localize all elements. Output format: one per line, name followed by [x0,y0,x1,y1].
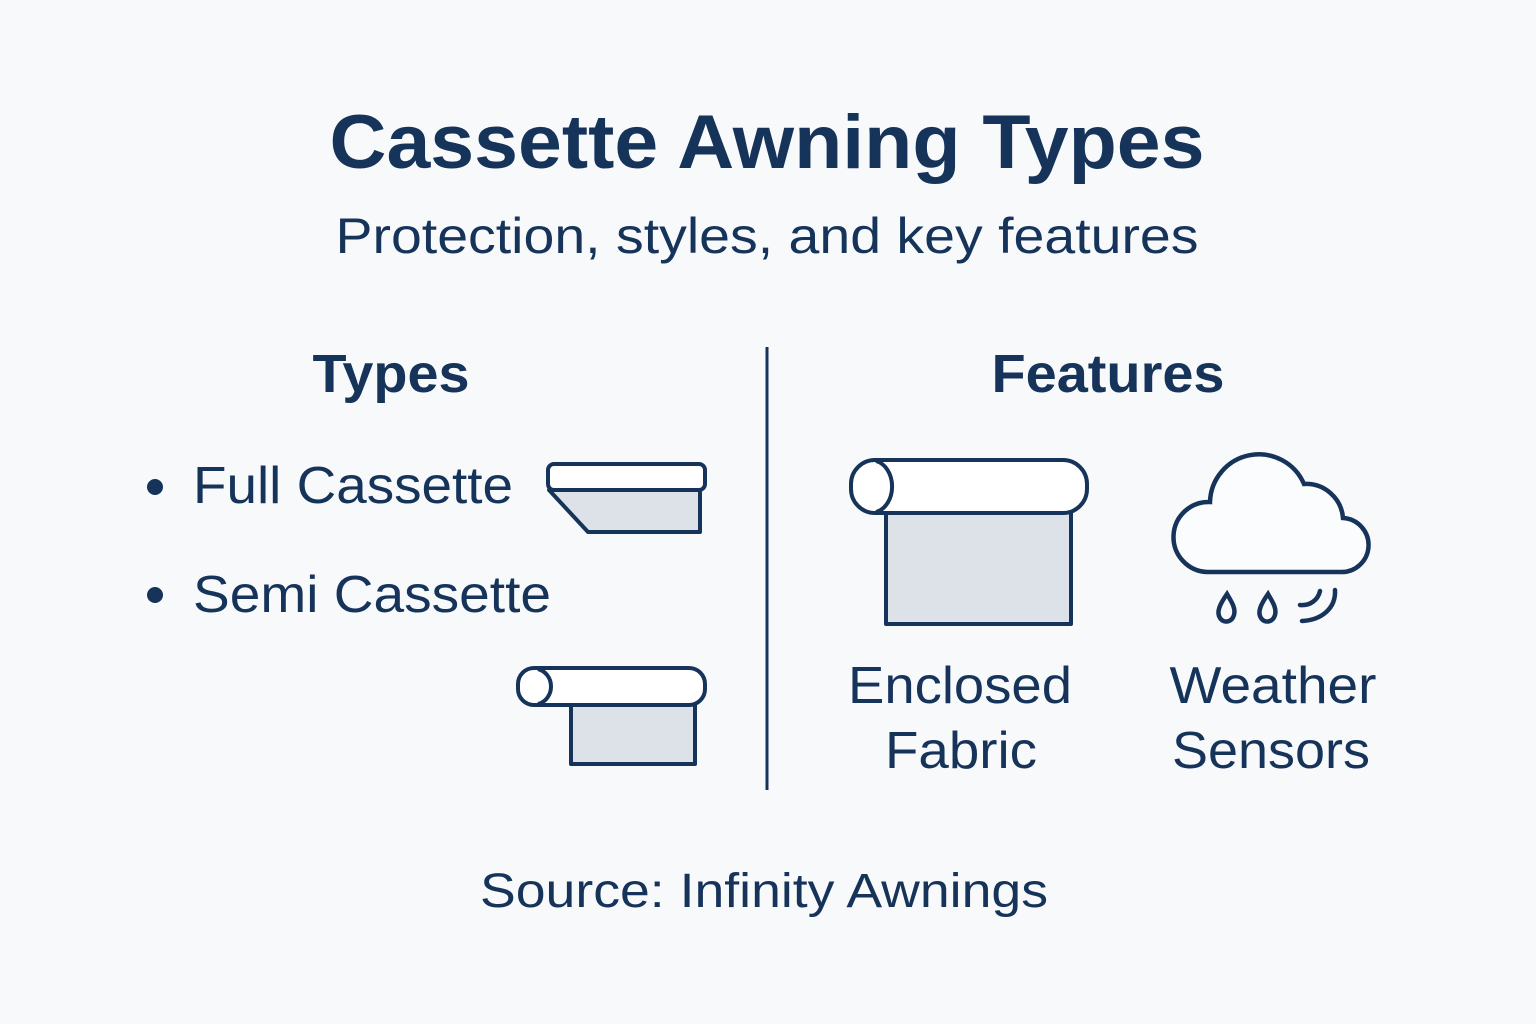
icon: enclosed fabric [851,460,1087,624]
source: Source: Infinity Awnings [480,865,1048,918]
icon: semi cassette [518,668,705,764]
types list: Full Cassette [193,457,513,515]
icon: full cassette [548,464,705,532]
label: enclosed fabric: Fabric [885,722,1037,780]
types list: Semi Cassette [193,566,551,624]
label: enclosed fabric [848,657,1072,780]
label: weather sensors: Sensors [1172,722,1370,780]
subtitle: Protection, styles, and key features [336,208,1198,264]
label: weather sensors [1170,657,1376,780]
heading: Types: Types [312,344,470,404]
title: Cassette Awning Types [330,100,1204,185]
label: enclosed fabric: Enclosed [848,657,1072,715]
heading: Features: Features [992,344,1224,404]
icon: weather cloud [1173,454,1369,622]
types list [147,457,551,624]
label: weather sensors: Weather [1170,657,1376,715]
